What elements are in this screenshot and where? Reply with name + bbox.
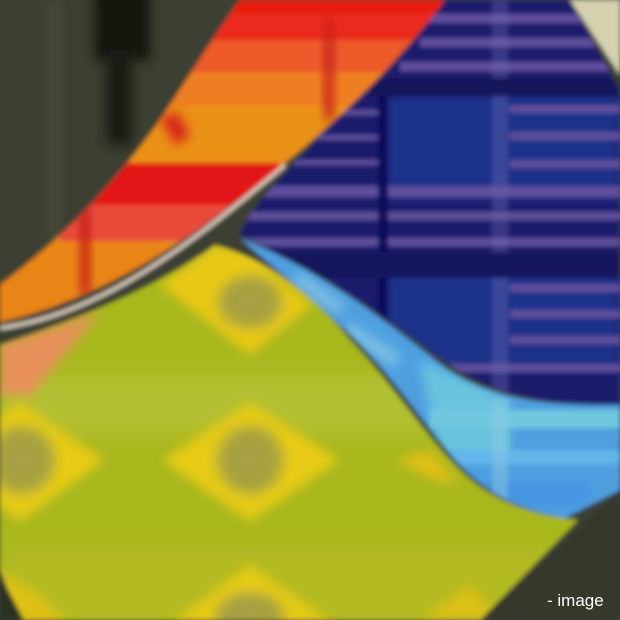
icon: yellow diamond tile bottom xyxy=(170,565,335,620)
corner: dark bottom left xyxy=(0,575,24,620)
caption: - image xyxy=(547,591,604,610)
panel: yellow-green diamonds xyxy=(0,230,600,620)
panel: red-orange band xyxy=(0,0,460,330)
corner: dark bottom right xyxy=(482,490,620,620)
icon: yellow diamond tile top xyxy=(160,245,312,355)
panel: blue wave stripe xyxy=(230,230,620,530)
white curve stripe xyxy=(0,165,285,328)
corner: beige top right xyxy=(570,0,620,75)
panel: navy plaid xyxy=(220,0,620,420)
icon: yellow diamond tile centre xyxy=(162,402,340,522)
icon: yellow diamond tile left xyxy=(0,402,105,522)
